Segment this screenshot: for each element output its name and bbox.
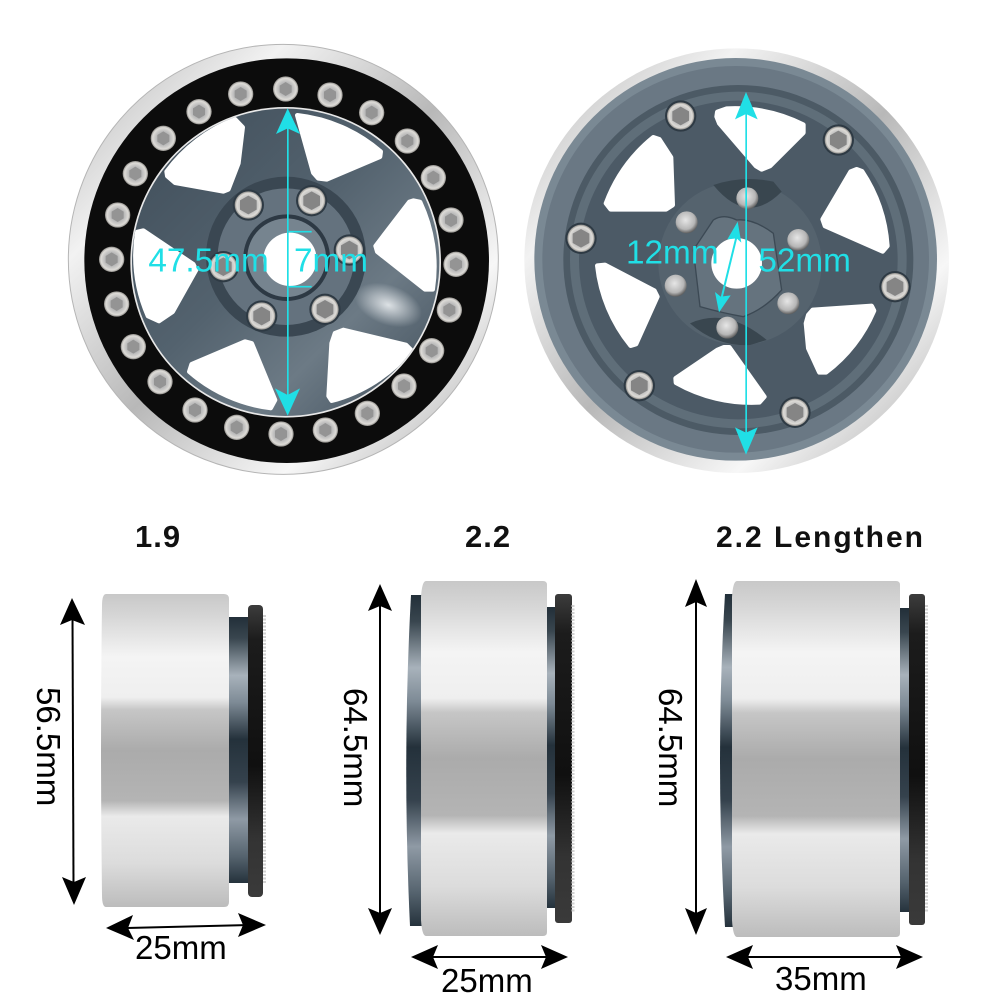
highlight on lower right spoke [349, 274, 428, 336]
label: 64.5mm lengthen: 64.5mm [652, 688, 689, 807]
arrow: 47.5mm height [275, 108, 300, 416]
label: 64.5mm 2.2: 64.5mm [337, 688, 374, 807]
inner hub screws [665, 187, 809, 339]
arrow: 52mm height [735, 92, 758, 455]
arrow: 35mm width [726, 945, 923, 969]
side view: 2.2 wheel [406, 581, 573, 936]
arrow: 25mm width 1.9 [106, 913, 266, 940]
wheel: 1.9 front view with beadlock ring [68, 44, 498, 474]
label: 25mm 2.2: 25mm [441, 962, 533, 999]
white spoke openings [136, 115, 434, 408]
heading: 2.2 Lengthen: 2.2 Lengthen [716, 521, 923, 554]
label: 25mm 1.9: 25mm [135, 929, 227, 966]
label: 47.5mm: 47.5mm [148, 243, 269, 280]
heading: 2.2: 2.2 [465, 519, 511, 554]
arrow: 12mm hex [715, 222, 741, 312]
heading: 1.9: 1.9 [135, 519, 181, 554]
arrow: 56.5mm height [60, 598, 86, 905]
side view: 1.9 wheel [101, 594, 264, 907]
wheel: 2.2 rear view [524, 48, 949, 473]
label: 7mm: 7mm [294, 243, 368, 280]
label: 12mm: 12mm [626, 234, 719, 271]
arrow: 25mm width 2.2 [411, 945, 568, 969]
hub with centre bore [206, 177, 366, 337]
side view: 2.2 lengthen wheel [720, 581, 926, 937]
white spoke openings [597, 108, 887, 403]
label: 52mm: 52mm [758, 243, 851, 280]
beadlock rivets [99, 76, 469, 447]
hub with hex seat and bore [658, 179, 822, 345]
outer bolts [565, 100, 911, 428]
arrow: 64.5mm height lengthen [685, 579, 707, 935]
hub bolts [208, 185, 365, 332]
label: 35mm: 35mm [775, 960, 867, 997]
arrow: 64.5mm height 2.2 [368, 584, 392, 935]
caliper: 7mm bore [289, 232, 312, 287]
label: 56.5mm: 56.5mm [30, 687, 67, 806]
